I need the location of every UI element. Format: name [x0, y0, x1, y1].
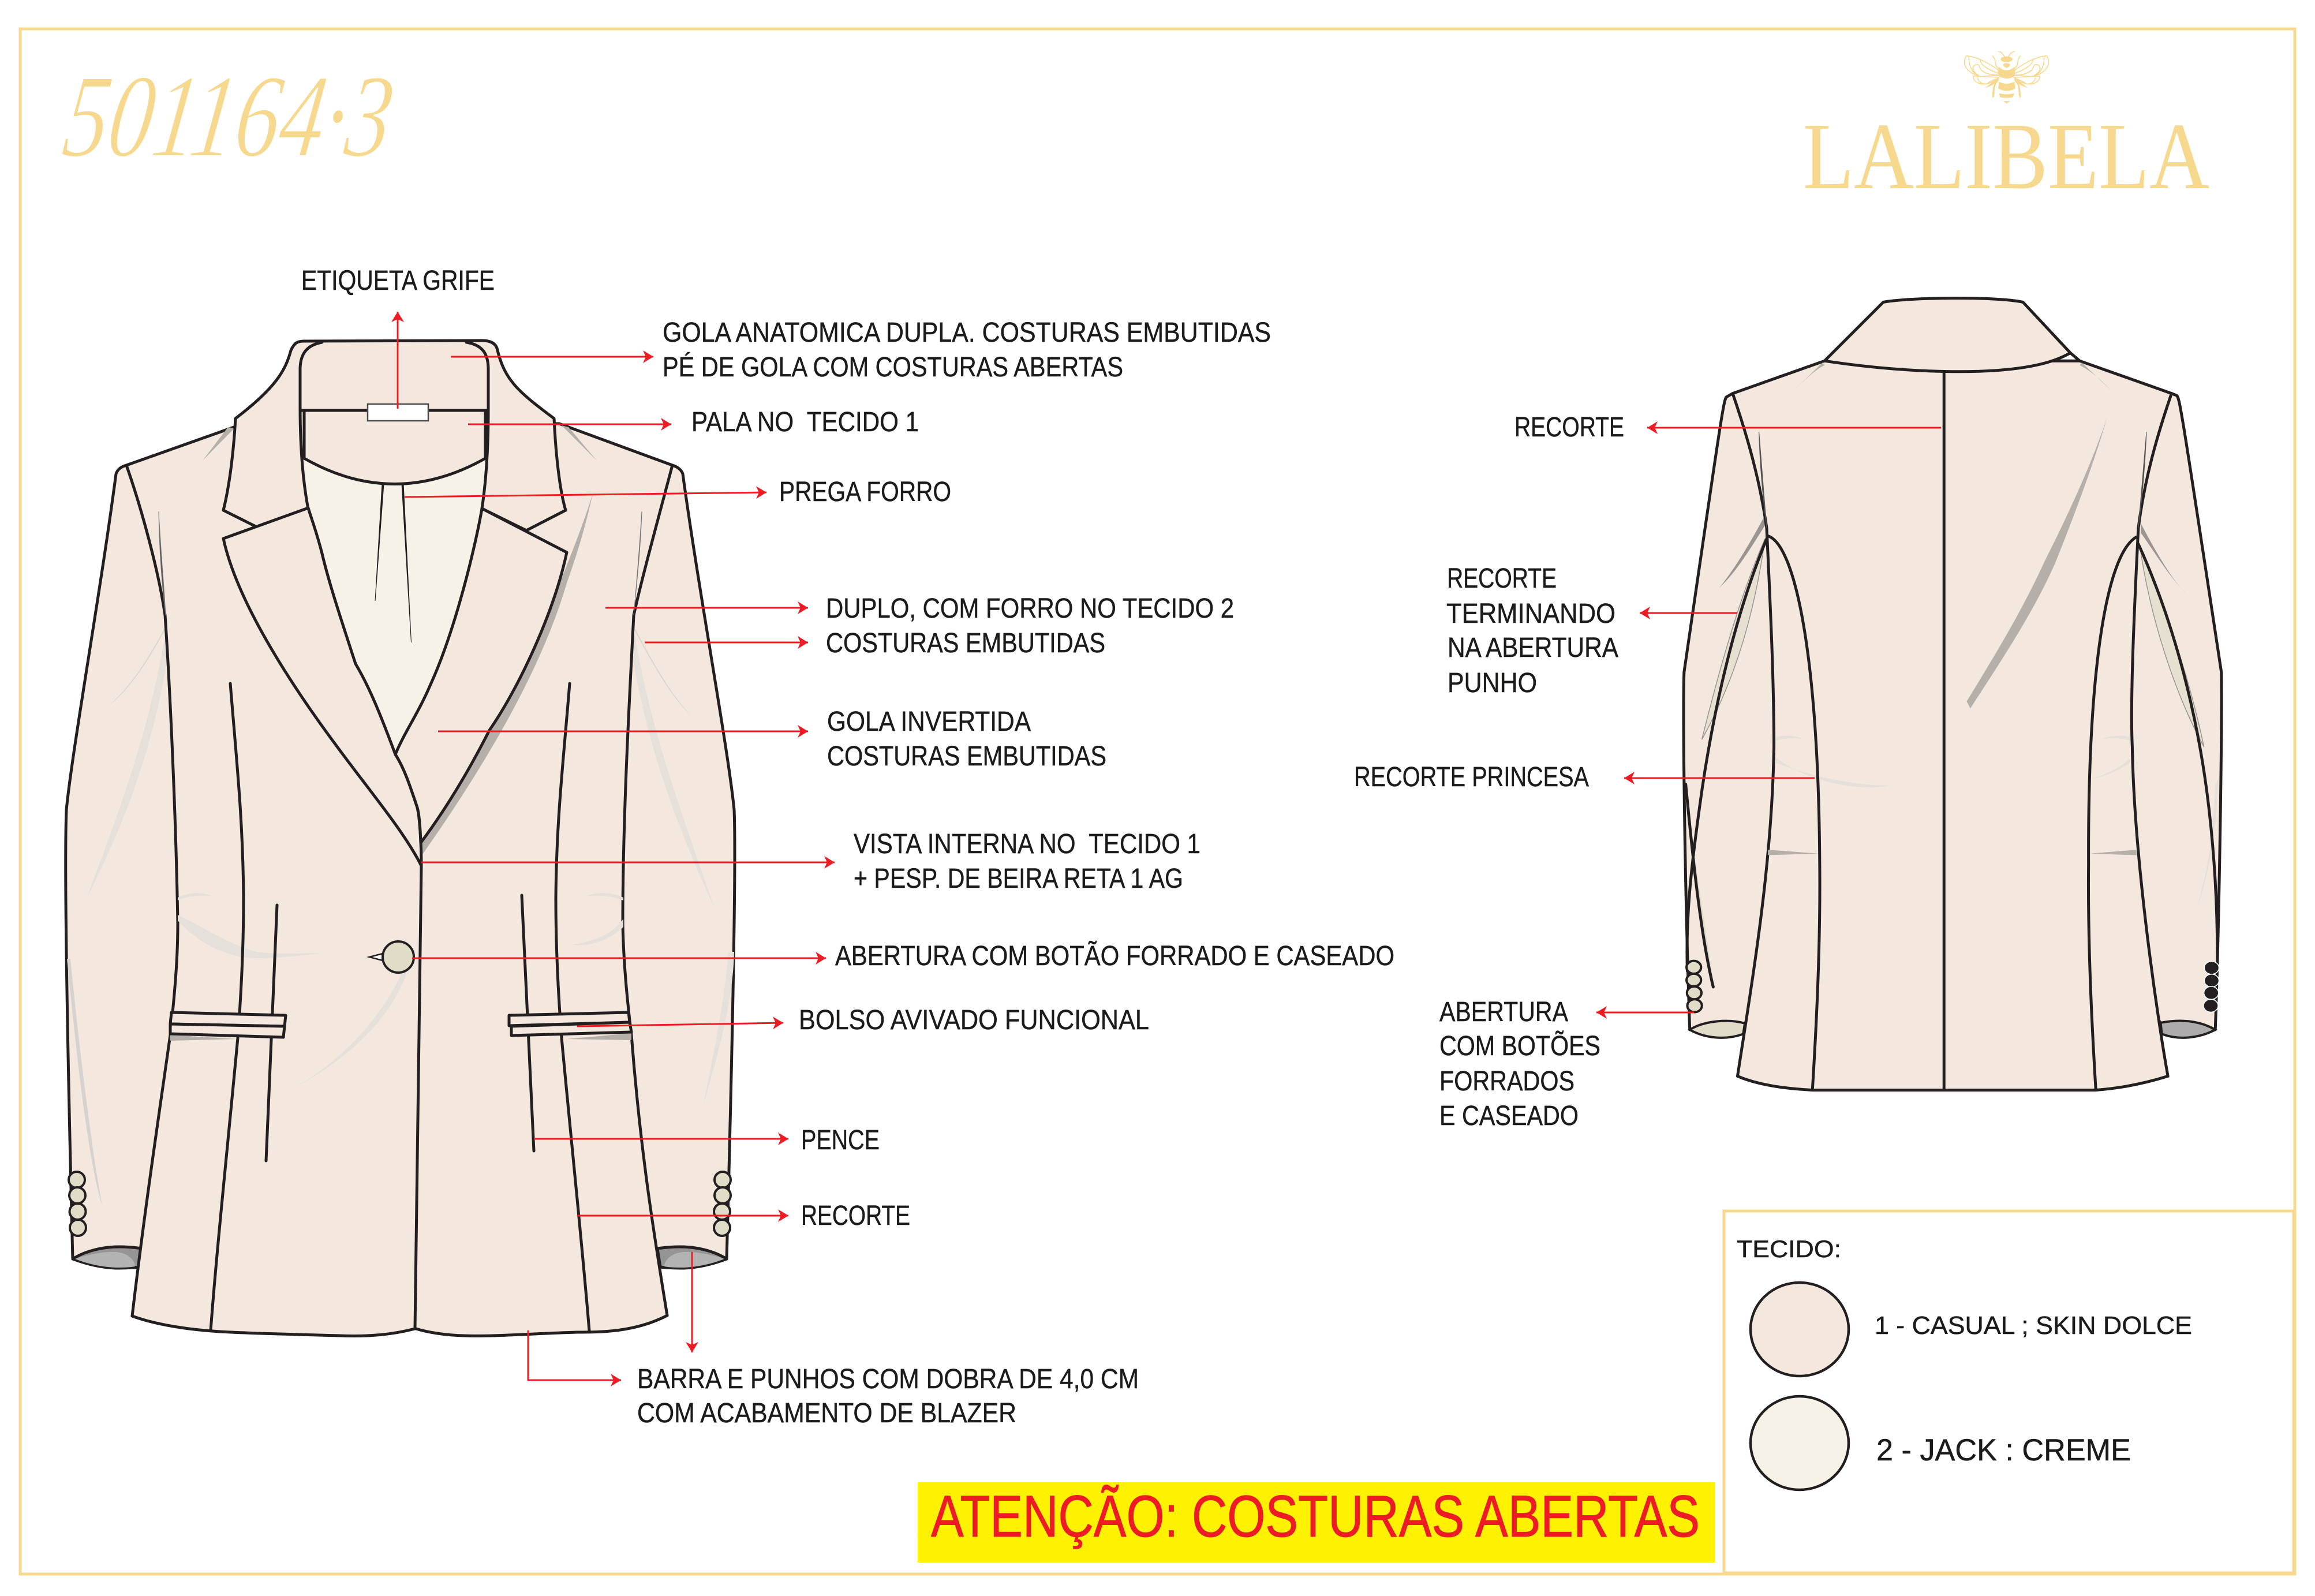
- text: abertura com botoes: [1439, 997, 1600, 1131]
- front button with buttonhole: [369, 941, 414, 973]
- text: recorte back: RECORTE: [1514, 412, 1624, 443]
- text: barra e punhos: COM ACABAMENTO DE BLAZER: [637, 1398, 1016, 1429]
- text: gola anatomica: [663, 317, 1271, 383]
- text: barra e punhos: BARRA E PUNHOS COM DOBRA DE 4,0 CM: [637, 1364, 1139, 1395]
- text: recorte front: RECORTE: [801, 1201, 910, 1231]
- front body: [126, 424, 672, 1336]
- brand name: LALIBELA: [1803, 103, 2209, 209]
- text: recorte terminando: [1446, 563, 1618, 698]
- right sleeve buttons: [714, 1172, 731, 1236]
- back collar: [1824, 298, 2070, 372]
- lining, fabric 2: [304, 458, 485, 754]
- back left sleeve buttons: [1686, 961, 1702, 1012]
- front jacket drawing: [66, 341, 735, 1336]
- shoulder and collar shadow: [159, 425, 642, 854]
- legend heading: TECIDO:: [1737, 1235, 1841, 1262]
- pleat: [375, 484, 411, 642]
- text: vista interna: [854, 829, 1200, 894]
- text: gola invertida: GOLA INVERTIDA: [827, 707, 1031, 737]
- text: pence: PENCE: [801, 1125, 880, 1156]
- collar outer: [223, 341, 566, 530]
- annotation arrows: front: [398, 312, 835, 1380]
- text: gola anatomica: GOLA ANATOMICA DUPLA. COSTURAS EMBUTIDAS: [663, 317, 1271, 348]
- icon: bee: [1965, 51, 2048, 103]
- text: recorte terminando: NA ABERTURA: [1448, 633, 1618, 663]
- back jacket drawing: [1684, 298, 2221, 1090]
- legend text: fabric 1: 1 - CASUAL ; SKIN DOLCE: [1875, 1311, 2192, 1340]
- sleeve shading: [1687, 517, 2219, 987]
- front left cuff: [73, 1247, 142, 1268]
- text: gola anatomica: PÉ DE GOLA COM COSTURAS ABERTAS: [663, 352, 1123, 383]
- text: abertura com botoes: ABERTURA: [1439, 997, 1568, 1027]
- back right cuff: [2161, 1021, 2215, 1038]
- text: bolso: BOLSO AVIVADO FUNCIONAL: [799, 1005, 1149, 1036]
- text: prega forro: PREGA FORRO: [779, 477, 951, 507]
- back left sleeve: [1684, 394, 1786, 1030]
- text: recorte terminando: TERMINANDO: [1446, 599, 1615, 629]
- back left cuff: [1690, 1021, 1745, 1038]
- legend text: fabric 2: 2 - JACK : CREME: [1876, 1433, 2131, 1467]
- left pocket: [170, 1012, 286, 1041]
- panel: fabric legend: [1724, 1211, 2294, 1573]
- front right cuff: [657, 1247, 727, 1268]
- right pocket: [509, 1012, 631, 1040]
- sleeve fold shading: [67, 626, 734, 1206]
- back right sleeve: [2118, 394, 2221, 1030]
- annotation arrows: back: [1596, 428, 1941, 1012]
- text: duplo: COSTURAS EMBUTIDAS: [826, 628, 1105, 659]
- swatch: fabric 1: [1751, 1283, 1849, 1376]
- neckline seams: [300, 342, 488, 509]
- text: gola invertida: COSTURAS EMBUTIDAS: [827, 741, 1106, 772]
- front left sleeve: [66, 465, 196, 1259]
- text: barra e punhos: [637, 1364, 1139, 1429]
- body fold shading: [178, 893, 623, 1104]
- back shading: [1759, 362, 2146, 855]
- back right sleeve buttons: [2204, 962, 2219, 1012]
- text: recorte princesa: RECORTE PRINCESA: [1354, 762, 1589, 793]
- back seams: [1686, 353, 2217, 1090]
- right lapel: [395, 509, 567, 843]
- text: vista interna: VISTA INTERNA NO TECIDO 1: [854, 829, 1200, 859]
- back body: [1733, 361, 2171, 1090]
- text: duplo: [826, 593, 1234, 659]
- swatch: fabric 2: [1751, 1396, 1849, 1490]
- left lapel: [223, 508, 421, 866]
- logo: Lalibela brand: [1803, 51, 2209, 209]
- text: vista interna: + PESP. DE BEIRA RETA 1 AG: [854, 864, 1183, 894]
- text: abertura com botoes: E CASEADO: [1439, 1101, 1579, 1131]
- label: etiqueta: [368, 404, 428, 421]
- text: duplo: DUPLO, COM FORRO NO TECIDO 2: [826, 593, 1234, 624]
- text: abertura com botoes: FORRADOS: [1439, 1066, 1575, 1097]
- text: abertura com botoes: COM BOTÕES: [1439, 1030, 1600, 1061]
- princess seams and center front: [211, 683, 589, 1331]
- front right sleeve: [600, 465, 735, 1259]
- text: recorte terminando: PUNHO: [1448, 668, 1537, 698]
- text: pala: PALA NO TECIDO 1: [691, 407, 919, 438]
- text: abertura com botao: ABERTURA COM BOTÃO FORRADO E CASEADO: [835, 940, 1394, 971]
- text: recorte terminando: RECORTE: [1447, 563, 1557, 594]
- callout: atenção costuras abertas: ATENÇÃO: COSTURAS ABERTAS: [931, 1483, 1700, 1549]
- text: etiqueta grife: ETIQUETA GRIFE: [301, 266, 495, 296]
- text: gola invertida: [827, 707, 1106, 772]
- title: style code: 501164·3: [57, 50, 402, 182]
- left sleeve buttons: [69, 1172, 86, 1236]
